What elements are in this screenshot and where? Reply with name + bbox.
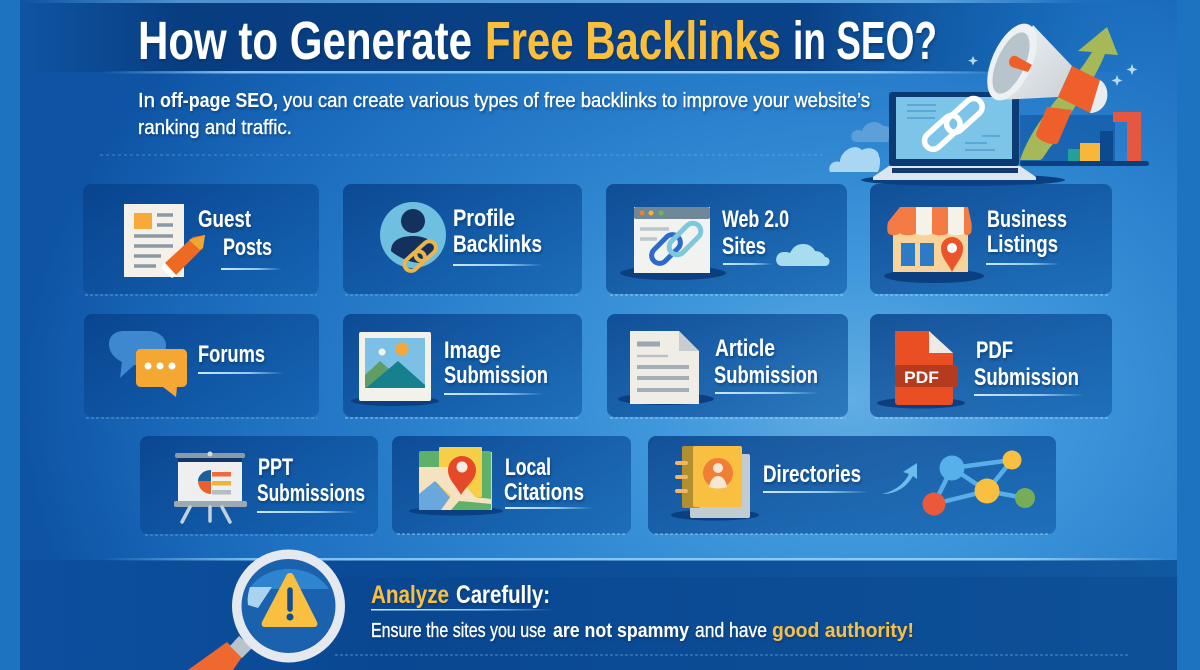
- icon: article page: [618, 331, 714, 405]
- label: PDF: [976, 337, 1013, 364]
- intro text: ranking and traffic.: [138, 117, 292, 139]
- icon: laptop with chain link: [861, 92, 1065, 186]
- icon: pdf file: [877, 331, 965, 408]
- title: in SEO?: [793, 11, 937, 71]
- callout text: [371, 620, 914, 642]
- panel: directories: [648, 436, 1056, 534]
- label: Listings: [987, 231, 1058, 258]
- label: Citations: [504, 479, 584, 506]
- panel: business listings: [870, 184, 1112, 295]
- icon: storefront with pin: [884, 207, 984, 283]
- label: [444, 337, 548, 389]
- icon: megaphone: [977, 16, 1107, 144]
- panel: ppt submissions: [140, 436, 378, 535]
- icon: browser window with link: [620, 207, 726, 280]
- panel: web 2.0 sites: [606, 184, 847, 295]
- label: Sites: [722, 233, 766, 260]
- callout heading: [371, 581, 550, 609]
- label: Submissions: [257, 480, 365, 507]
- label: PPT: [258, 454, 293, 481]
- label: Submission: [444, 362, 548, 389]
- icon: cloud: [776, 244, 830, 266]
- title: [138, 11, 937, 71]
- icon: network graph: [922, 450, 1035, 516]
- label: Directories: [763, 461, 861, 488]
- arrow: [882, 463, 917, 494]
- panel: profile backlinks: [343, 184, 582, 295]
- icon: presentation board: [174, 452, 247, 522]
- hero illustration: laptop, megaphone and growth chart: [829, 16, 1149, 186]
- icon: chat bubbles: [109, 331, 187, 397]
- panel: guest posts: [83, 184, 319, 295]
- label: Backlinks: [453, 231, 542, 258]
- label: [722, 206, 789, 260]
- panel: image submission: [343, 314, 582, 418]
- title: How to Generate: [138, 11, 472, 71]
- label: Profile: [453, 205, 515, 232]
- label: [987, 206, 1067, 258]
- label: [714, 335, 818, 389]
- callout heading: Analyze: [371, 581, 449, 609]
- callout text: Ensure the sites you use: [371, 620, 546, 642]
- label: Image: [444, 337, 501, 364]
- label: Guest: [198, 206, 251, 233]
- callout text: good authority!: [772, 620, 914, 642]
- icon: clouds: [829, 122, 891, 172]
- icon: document with pencil: [124, 204, 205, 278]
- label: [974, 337, 1079, 391]
- label: Business: [987, 206, 1067, 233]
- label: [453, 205, 542, 258]
- label: Posts: [223, 234, 272, 261]
- label: Submission: [714, 362, 818, 389]
- label: Submission: [974, 364, 1079, 391]
- label: Forums: [198, 341, 265, 368]
- panel: local citations: [392, 436, 631, 534]
- label: [504, 454, 584, 506]
- icon: map with pin: [409, 447, 503, 516]
- callout text: and have: [695, 620, 767, 642]
- intro text: you can create various types of free backlinks to improve your website’s: [283, 90, 870, 112]
- icon: growth arrow: [1020, 27, 1118, 160]
- icon: profile with chain link: [380, 202, 446, 274]
- icon: magnifying glass with warning sign: [188, 550, 345, 670]
- icon: sparkles: [968, 56, 1138, 86]
- bar chart: [1020, 112, 1149, 166]
- label: Web 2.0: [722, 206, 789, 233]
- header band: [20, 0, 1177, 74]
- label: [257, 454, 365, 507]
- callout heading: Carefully:: [456, 581, 550, 609]
- label: Local: [505, 454, 551, 481]
- label: [198, 206, 272, 261]
- panel: article submission: [607, 314, 848, 418]
- panel: forums: [84, 314, 319, 418]
- intro text: [138, 90, 870, 139]
- panel: pdf submission: [870, 314, 1112, 418]
- title: Free Backlinks: [485, 11, 781, 71]
- bottom callout band: [20, 558, 1177, 670]
- callout text: are not spammy: [553, 620, 690, 642]
- icon: address book: [671, 446, 759, 520]
- icon: pdf file: PDF: [904, 368, 939, 387]
- intro text: In: [138, 90, 155, 112]
- label: Article: [715, 335, 775, 362]
- intro text: off-page SEO,: [160, 90, 278, 112]
- icon: framed landscape: [351, 332, 439, 406]
